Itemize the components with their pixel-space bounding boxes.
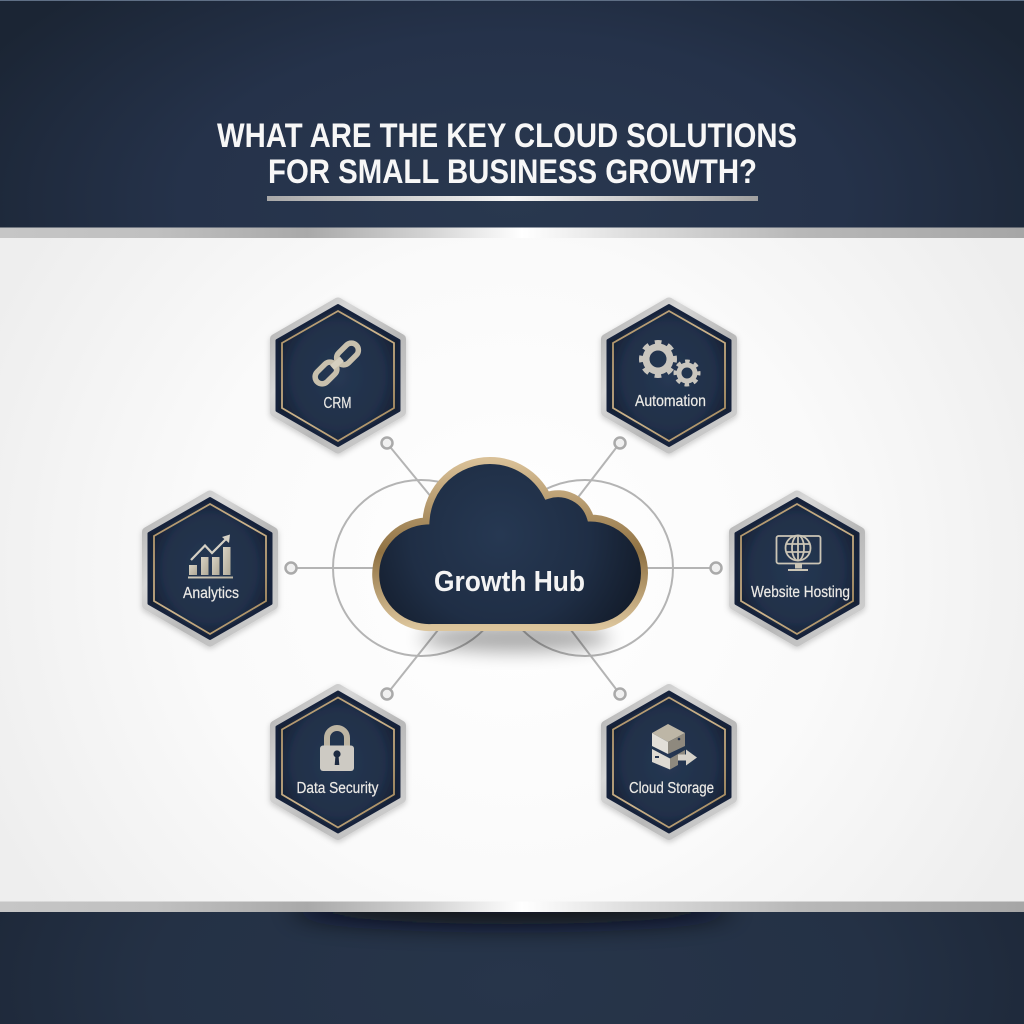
icon: padlock bbox=[320, 728, 354, 771]
central cloud: Growth Hub bbox=[376, 460, 644, 628]
label: Cloud Storage: Cloud Storage bbox=[629, 780, 714, 797]
cloud shadow bbox=[420, 624, 610, 652]
title: WHAT ARE THE KEY CLOUD SOLUTIONS bbox=[217, 117, 797, 155]
icon: gears bbox=[642, 342, 698, 384]
icon: server boxes with arrow bbox=[652, 724, 697, 770]
top metallic divider bbox=[0, 228, 1024, 238]
hexagon: Analytics bbox=[147, 496, 273, 642]
top header band bbox=[0, 0, 1024, 228]
label: Automation: Automation bbox=[635, 393, 706, 410]
title bbox=[217, 117, 797, 191]
hexagon: Website Hosting bbox=[734, 496, 860, 642]
label: Analytics: Analytics bbox=[183, 585, 239, 602]
bottom metallic divider bbox=[0, 902, 1024, 912]
connector network bbox=[286, 438, 722, 700]
icon: growth chart bbox=[188, 534, 233, 578]
title underline bbox=[267, 196, 758, 201]
icon: chain link bbox=[312, 340, 361, 387]
title: FOR SMALL BUSINESS GROWTH? bbox=[268, 153, 757, 191]
label: Website Hosting: Website Hosting bbox=[751, 584, 850, 601]
hexagon: Data Security bbox=[275, 689, 401, 835]
cloud label: Growth Hub bbox=[434, 566, 585, 598]
middle content background bbox=[0, 238, 1024, 902]
label: CRM: CRM bbox=[324, 395, 352, 412]
bottom footer band bbox=[0, 892, 1024, 1024]
hexagon: Automation bbox=[606, 302, 732, 448]
hexagon: CRM bbox=[275, 302, 401, 448]
label: Data Security: Data Security bbox=[296, 780, 379, 797]
icon: monitor with globe bbox=[776, 536, 820, 571]
hexagon: Cloud Storage bbox=[606, 689, 732, 835]
